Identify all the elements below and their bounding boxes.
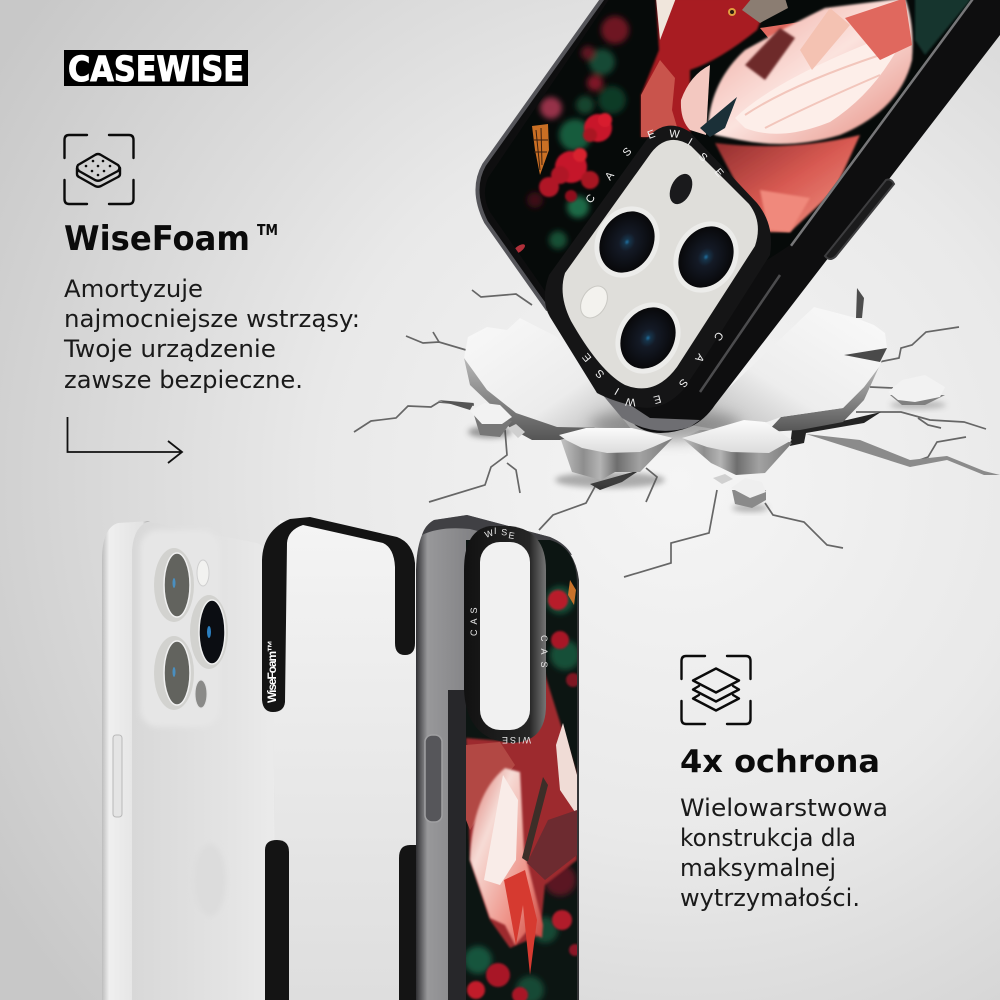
- flamingo side body: [466, 668, 577, 948]
- teal foliage top right: [915, 0, 972, 55]
- camera island: [545, 126, 771, 408]
- camera plateau: [140, 530, 220, 727]
- lens 2: [190, 595, 228, 669]
- slab: large left fragment: [464, 318, 640, 440]
- arrow: [68, 417, 182, 463]
- foam strip lower left: [265, 840, 289, 1000]
- text block: WiseFoam description: Amortyzuje: [64, 275, 203, 303]
- ring text top: WISE: [483, 526, 515, 541]
- apple logo ghost: [194, 844, 226, 916]
- slab: large right fragment: [690, 288, 887, 432]
- foam strip with WiseFoam label: [262, 517, 415, 712]
- slab: centre right fragment: [682, 420, 792, 475]
- flamingo pale patch: [681, 65, 710, 135]
- phone outer case: [477, 0, 1000, 433]
- side artwork: [464, 530, 581, 1000]
- camera ring: [464, 526, 546, 743]
- panel: foam layer background: [272, 520, 420, 1000]
- petal: [515, 244, 525, 253]
- camera lens top left: [582, 194, 672, 290]
- camera lens right: [661, 209, 751, 305]
- slab: centre left fragment: [555, 428, 673, 488]
- phone lower thin highlight: [700, 275, 780, 392]
- side button: [113, 735, 122, 817]
- frame dark lower section: [448, 690, 466, 1000]
- ring text right: CAS: [539, 635, 549, 675]
- ring text bottom: WISE: [500, 735, 531, 745]
- camera cutout: [480, 542, 530, 730]
- lens 1: [154, 548, 194, 622]
- phone: top, tilted with camera: [470, 0, 1000, 433]
- camera lens bottom: [603, 290, 693, 386]
- foam strip with WiseFoam label: WiseFoam™: [265, 640, 279, 703]
- side frame: [102, 521, 150, 1000]
- case top edge: [422, 515, 572, 555]
- lens 3: [154, 636, 194, 710]
- camera sensor: [665, 170, 697, 208]
- text block: WiseFoam description: najmocniejsze wstrząsy:: [64, 305, 360, 333]
- text block: WiseFoam description: Twoje urządzenie: [63, 335, 276, 363]
- text block: WiseFoam description: zawsze bezpieczne.: [64, 366, 303, 394]
- back body: [132, 522, 276, 1000]
- flamingo wing feathers: [708, 0, 913, 144]
- icon: layers in brackets: [682, 656, 750, 724]
- phone bottom glossy rim: [586, 375, 700, 431]
- ring text left: CAS: [469, 602, 479, 636]
- icon: foam in brackets: [64, 135, 134, 204]
- text block: WiseFoam description: [63, 275, 360, 394]
- foam strip lower right: [399, 845, 416, 1000]
- text block: protection description: wytrzymałości.: [680, 884, 860, 912]
- heading: 4x ochrona: 4x ochrona: [680, 744, 880, 780]
- phone: case side with art: [416, 515, 581, 1000]
- text block: protection description: [680, 794, 888, 912]
- ring text: CASEWISE upper: CASEWISE: [584, 128, 726, 206]
- text block: protection description: konstrukcja dla: [680, 824, 856, 852]
- logo: CASEWISE: CASEWISE: [68, 50, 244, 90]
- phone: white back: [102, 521, 276, 1000]
- butterfly: [532, 124, 549, 175]
- case frame: [416, 515, 579, 1000]
- text block: protection description: maksymalnej: [680, 854, 836, 882]
- phone artwork: flamingo and roses: [485, 0, 970, 290]
- phone side button: [825, 180, 894, 259]
- heading: WiseFoam: TM: [257, 221, 278, 239]
- text block: protection description: Wielowarstwowa: [680, 794, 888, 822]
- ring text: CASEWISE lower: CASEWISE: [580, 329, 725, 408]
- sensor: [195, 680, 207, 708]
- cracks in the wall: [354, 290, 1000, 577]
- butterfly small: [568, 580, 576, 605]
- heading: WiseFoam: WiseFoam: [64, 219, 250, 259]
- soft shadow under phone: [590, 409, 740, 441]
- flamingo head and neck: [641, 0, 770, 137]
- rock fragments: [468, 375, 946, 512]
- phone right glossy band: [790, 0, 972, 245]
- case side button: [425, 735, 442, 822]
- phone left rim highlight: [477, 0, 603, 310]
- flash: [197, 560, 209, 586]
- flamingo body lower: [715, 135, 860, 232]
- camera flash: [575, 281, 613, 323]
